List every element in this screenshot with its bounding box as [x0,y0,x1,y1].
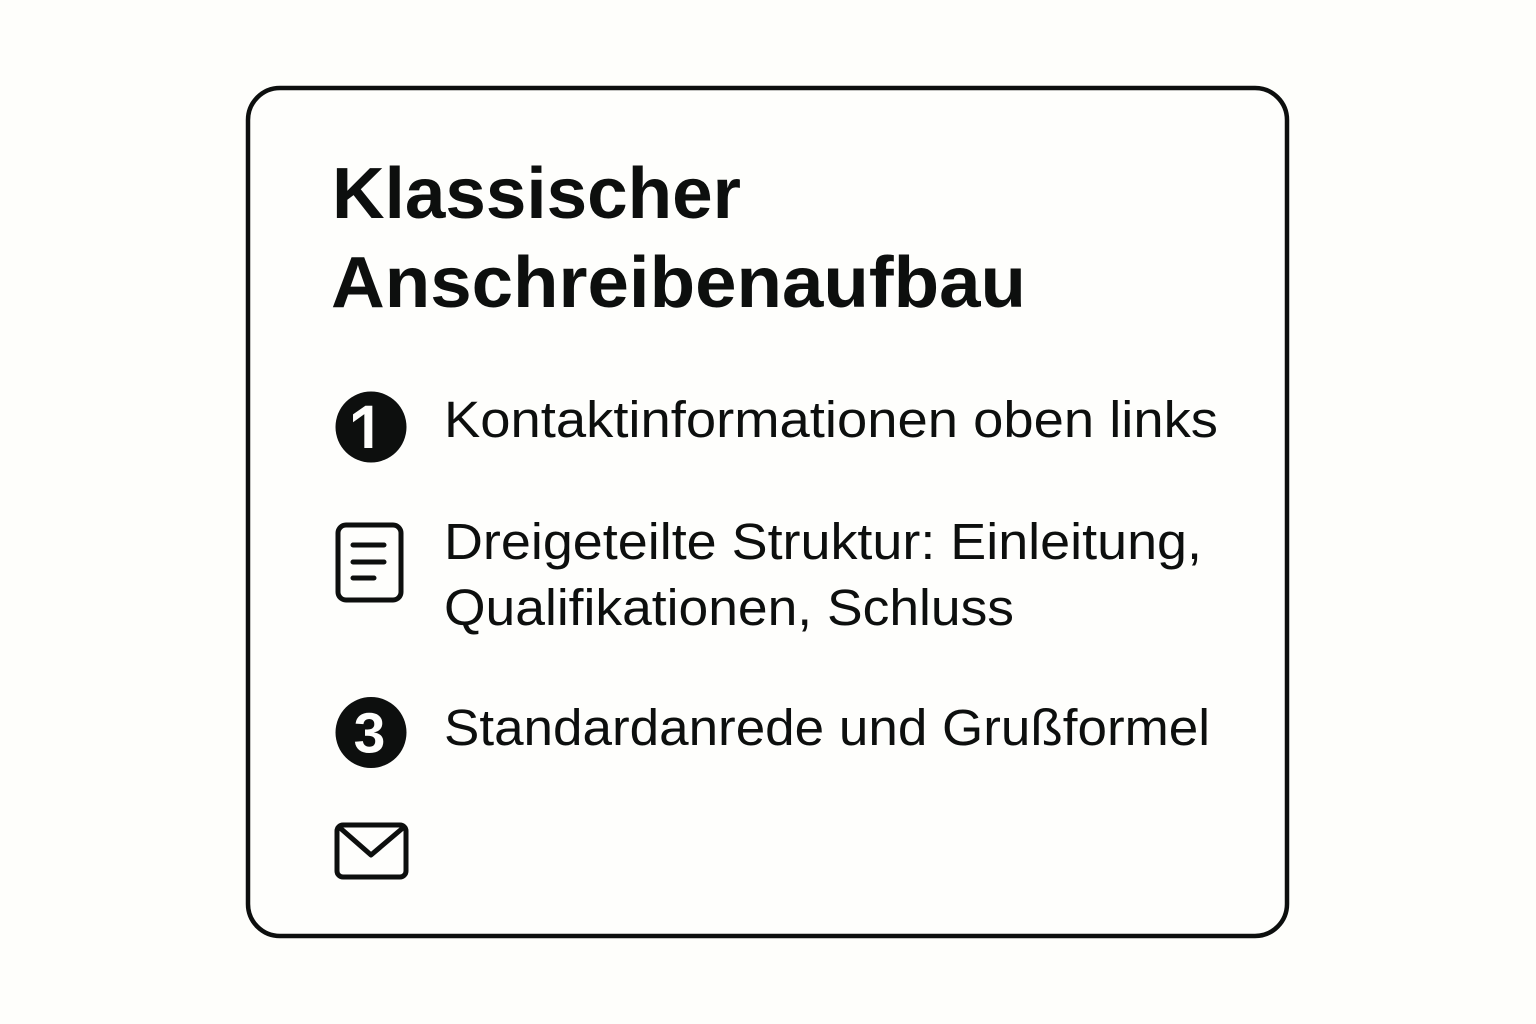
icon: document [338,525,401,600]
icon: number 1 [336,392,406,462]
text: three-part structure: Dreigeteilte Struktur: Einleitung, [444,513,1202,570]
text: three-part structure: Qualifikationen, Schluss [444,579,1014,636]
icon: number 1: 1 [347,392,387,473]
icon: envelope [337,825,406,877]
text: three-part structure [444,513,1202,636]
title [331,154,1026,323]
title: Anschreibenaufbau [331,243,1026,323]
icon: number 3 [336,697,406,768]
text: salutation and closing: Standardanrede und Grußformel [444,699,1210,756]
text: contact information: Kontaktinformationen oben links [444,391,1218,448]
icon: number 3: 3 [354,702,385,766]
title: Klassischer [332,154,741,234]
panel: card [248,88,1287,936]
